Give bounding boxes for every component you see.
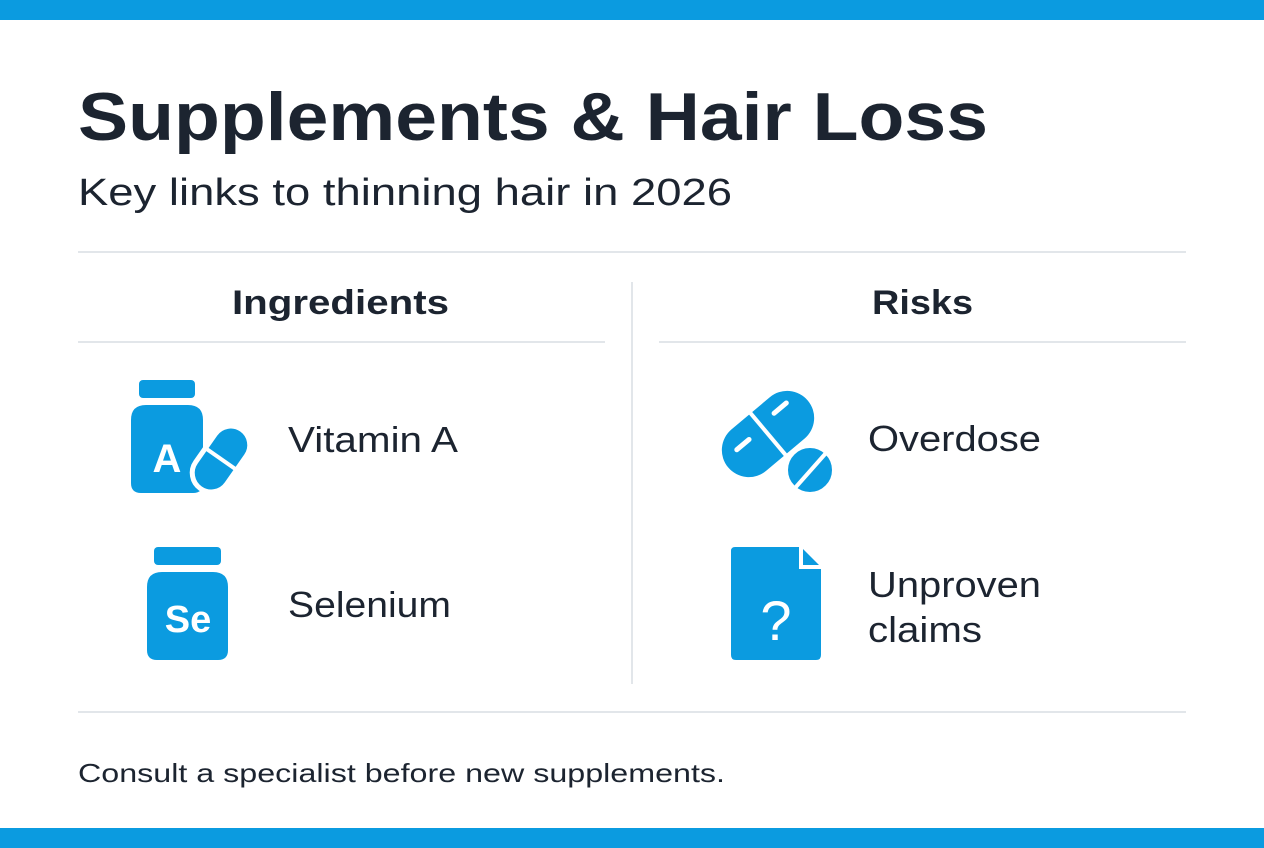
subtitle: Key links to thinning hair in 2026	[78, 172, 732, 214]
heading: risks: Risks	[872, 284, 973, 322]
label: unproven claims	[868, 564, 1041, 650]
label: selenium: Selenium	[288, 584, 451, 625]
bottom bar	[0, 828, 1264, 848]
icon: capsule and tablet	[710, 378, 834, 494]
icon: vitamin A bottle with pill	[131, 380, 257, 499]
heading: ingredients: Ingredients	[232, 284, 449, 322]
icon: selenium bottle	[147, 547, 228, 660]
icon: document with question mark: ?	[760, 589, 792, 652]
label: unproven claims: Unproven	[868, 564, 1041, 605]
icon: selenium bottle: Se	[165, 599, 211, 641]
footer note: Consult a specialist before new supplements.	[78, 758, 725, 788]
icon: document with question mark	[731, 547, 821, 660]
title: Supplements & Hair Loss	[78, 79, 988, 155]
label: vitamin A: Vitamin A	[288, 419, 458, 460]
top bar	[0, 0, 1264, 20]
label: unproven claims: claims	[868, 609, 982, 650]
label: overdose: Overdose	[868, 418, 1041, 459]
icon: vitamin A bottle with pill: A	[153, 437, 181, 481]
